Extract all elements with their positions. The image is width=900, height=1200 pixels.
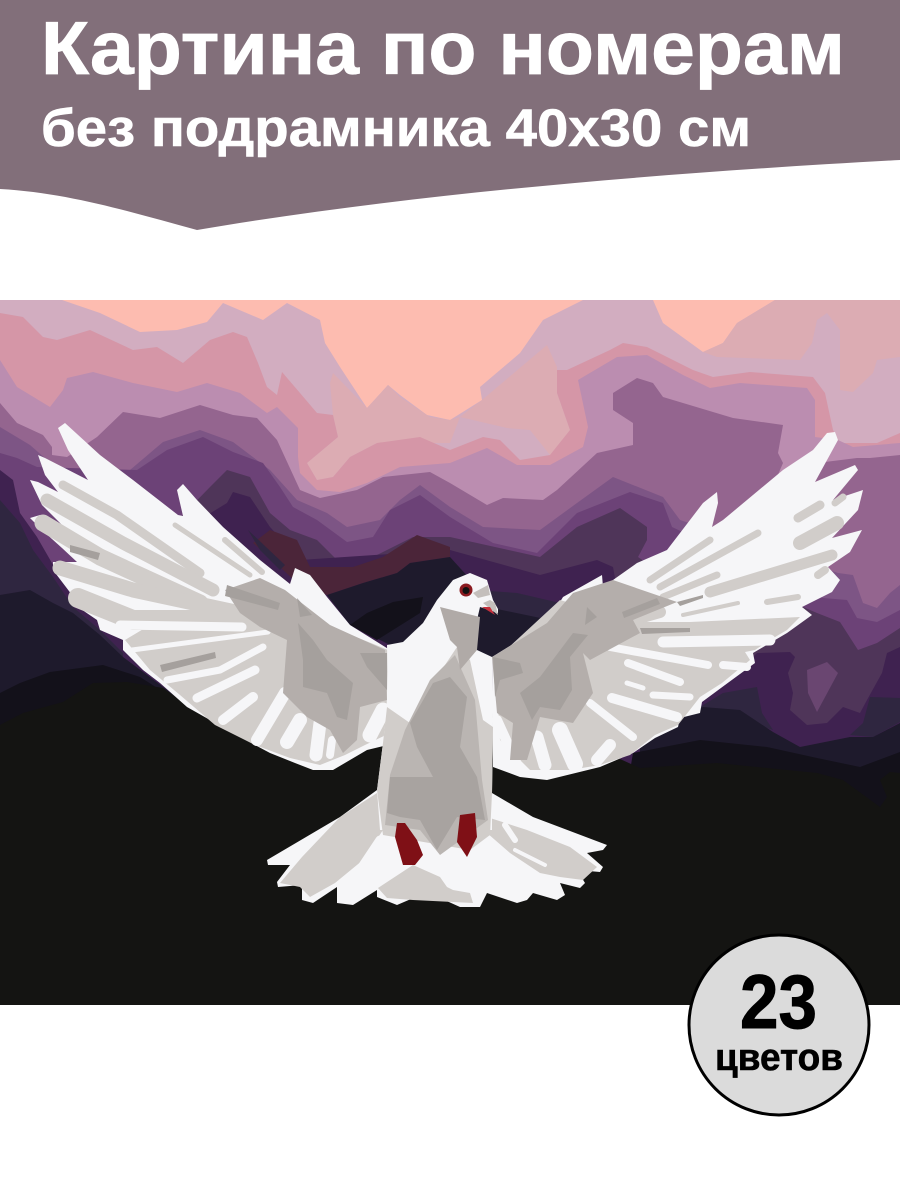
title: Картина по номерам (41, 6, 845, 90)
cloud layer: pale pink middle (307, 345, 570, 480)
right wing feather streaks (625, 497, 843, 622)
colour label: цветов (715, 1037, 843, 1079)
mountain layer: midnight (0, 557, 900, 830)
subtitle: без подрамника 40х30 см (41, 99, 751, 158)
tail shading (280, 793, 597, 903)
dove (30, 423, 863, 907)
badge: number of colours (689, 935, 869, 1115)
header banner (0, 0, 900, 230)
cloud layer: deep purple (0, 437, 900, 830)
foreground hill (0, 682, 900, 1005)
cloud layer: plum (0, 378, 900, 830)
body (377, 573, 498, 865)
cloud accent: maroon streak (253, 530, 450, 595)
mountain layer: near black (0, 597, 900, 830)
left wing dark shadow (70, 545, 387, 720)
cloud layer: orchid (0, 355, 900, 660)
left wing feather streaks (43, 485, 267, 620)
tail (267, 790, 607, 907)
cloud patch: lighter violet (807, 662, 838, 712)
cloud layer: pale mauve (0, 300, 900, 520)
painting: dove over purple mountains (0, 300, 900, 1005)
left wing mid shadow (225, 578, 387, 753)
tail white feather lines (350, 825, 545, 885)
body light shading (377, 647, 493, 850)
right wing dark shadow (493, 595, 703, 720)
cloud layer: rose (0, 313, 900, 620)
body mid shading (385, 655, 488, 855)
cloud layer: pale pink right (703, 300, 900, 392)
left wing lower feathers (125, 610, 388, 765)
cloud layer: dusk violet (100, 470, 900, 830)
colour count: 23 (740, 960, 817, 1045)
neck shading (440, 607, 480, 670)
sky background (0, 300, 900, 1005)
beak (482, 600, 498, 615)
right wing mid shadow (492, 580, 677, 760)
right wing white highlights (497, 640, 770, 765)
right wing (492, 432, 863, 780)
left wing (30, 423, 390, 770)
mountain layer: shadow violet (0, 500, 900, 800)
body dark shading (387, 677, 485, 850)
cloud layer: medium purple (0, 427, 900, 830)
left foot (395, 823, 423, 865)
head brow shading (473, 585, 490, 598)
cloud layer: dark violet (0, 470, 900, 830)
eye (460, 584, 472, 596)
right foot (457, 813, 477, 857)
left wing white highlights (120, 625, 383, 755)
right wing lower feathers (495, 600, 800, 770)
